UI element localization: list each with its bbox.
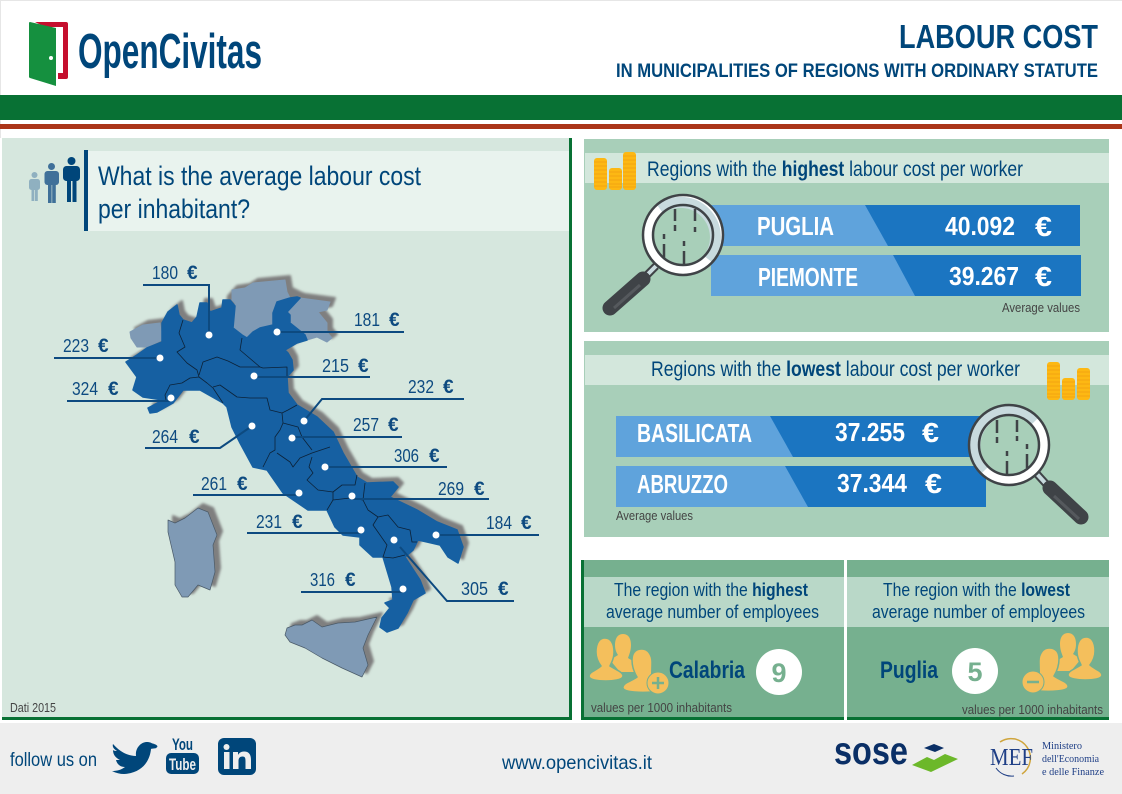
bar: Puglia — [711, 205, 1080, 246]
leader: 305: € — [498, 579, 509, 600]
leader: 305: 305 — [461, 579, 488, 599]
icon: people plus — [589, 634, 669, 694]
bar: Abruzzo: 37.344 — [837, 468, 907, 498]
leader: 184: € — [521, 513, 532, 534]
leader: 181: € — [389, 310, 400, 331]
leader: 316: 316 — [310, 570, 335, 590]
region name: Puglia — [880, 657, 939, 684]
leader: 261 — [193, 474, 302, 496]
leader: 316: € — [345, 570, 356, 591]
leader: 305 — [390, 536, 514, 601]
heading: Regions with the lowest labour cost per worker — [651, 358, 1020, 381]
website: www.opencivitas.it — [501, 752, 653, 774]
heading: average number of employees — [872, 601, 1085, 622]
regional borders — [165, 320, 417, 558]
leader: 184: 184 — [486, 513, 512, 533]
icon: youtube: Tube — [169, 755, 196, 774]
leader: 180: € — [187, 263, 198, 284]
leader: 180: 180 — [152, 263, 178, 283]
region name: Calabria — [669, 657, 746, 684]
source note: Dati 2015 — [10, 701, 56, 715]
leader: 181 — [274, 310, 404, 336]
header: logo — [29, 22, 262, 86]
bar: Puglia: 40.092 — [945, 211, 1015, 241]
leader: 223: € — [98, 336, 109, 357]
leader: 306: 306 — [394, 446, 419, 466]
icon: people — [29, 157, 80, 203]
leader: 264: € — [189, 427, 200, 448]
note: Average values — [616, 508, 693, 523]
icon: door — [29, 22, 68, 86]
panel: lowest number of employees — [847, 560, 1109, 720]
logo: MEF: e delle Finanze — [1042, 767, 1104, 778]
icon: people minus — [1022, 633, 1102, 693]
bar: Abruzzo — [616, 466, 986, 507]
leader: 215: € — [358, 356, 369, 377]
bar: Piemonte: PIEMONTE — [758, 262, 858, 292]
icon: linkedin — [218, 738, 256, 775]
icon: youtube: You — [172, 735, 193, 754]
leader: 184 — [432, 513, 539, 538]
leader: 264 — [145, 422, 256, 448]
header stripes — [0, 95, 1122, 129]
heading: average number of employees — [606, 601, 819, 622]
leader: 264: 264 — [152, 427, 178, 447]
leader: 324: € — [108, 379, 119, 400]
leader: 324 — [67, 379, 174, 402]
panel: highest number of employees — [581, 560, 844, 720]
leader: 261: 261 — [201, 474, 227, 494]
leader: 269 — [348, 479, 489, 500]
logo wordmark: OpenCivitas — [78, 25, 262, 79]
leader: 257 — [288, 415, 402, 442]
panel: lowest labour cost per worker — [584, 341, 1109, 537]
leader: 232: € — [443, 377, 454, 398]
islands and northern regions in grey — [130, 280, 377, 677]
leader: 232 — [300, 377, 464, 424]
leader: 257: 257 — [353, 415, 379, 435]
question band: per inhabitant? — [98, 194, 250, 224]
question band: What is the average labour cost — [98, 161, 421, 191]
bar: Piemonte: € — [1035, 261, 1052, 292]
bar: Puglia: € — [1035, 211, 1052, 242]
leader: 223 — [54, 336, 164, 362]
note: Average values — [1002, 300, 1080, 315]
icon: youtube — [166, 735, 199, 774]
map: Italy — [126, 276, 468, 677]
leader: 231 — [247, 512, 364, 534]
logo: MEF: Ministero — [1042, 741, 1082, 752]
ordinary statute regions — [126, 297, 463, 632]
leader: 257: € — [388, 415, 399, 436]
bar: Abruzzo: € — [925, 468, 942, 499]
bar: Piemonte — [711, 255, 1081, 296]
leader: 261: € — [237, 474, 248, 495]
leader: 269: € — [474, 479, 485, 500]
heading — [872, 579, 1085, 622]
heading: The region with the highest — [614, 579, 808, 600]
leader: 316 — [301, 570, 406, 592]
bar: Piemonte: 39.267 — [949, 261, 1019, 291]
bar: Puglia: PUGLIA — [757, 211, 834, 241]
value badge — [756, 649, 802, 695]
logo: sose: sose — [834, 730, 908, 773]
logo: MEF: dell'Economia — [1042, 754, 1099, 765]
question band — [84, 150, 569, 231]
bar: Abruzzo: ABRUZZO — [637, 469, 728, 499]
value badge — [952, 648, 998, 694]
heading — [606, 579, 819, 622]
icon: coins — [1047, 362, 1090, 400]
leader: 215: 215 — [322, 356, 349, 376]
heading: Regions with the highest labour cost per worker — [647, 158, 1023, 181]
logo: MEF — [990, 739, 1104, 778]
icon: coins — [594, 152, 636, 190]
leader: 324: 324 — [72, 379, 98, 399]
leader: 223: 223 — [63, 336, 89, 356]
value badge: 9 — [771, 658, 787, 688]
panel: highest labour cost per worker — [584, 139, 1109, 332]
note: values per 1000 inhabitants — [591, 700, 732, 715]
footer — [0, 723, 1122, 794]
value badge: 5 — [967, 657, 983, 687]
logo: MEF: MEF — [990, 745, 1033, 771]
icon: twitter — [112, 742, 157, 774]
bar: Basilicata: 37.255 — [835, 417, 905, 447]
icon: magnifying glass — [610, 195, 723, 308]
leader: 215 — [250, 356, 370, 380]
icon: magnifying glass — [969, 405, 1081, 519]
follow text: follow us on — [10, 749, 97, 771]
leader: 232: 232 — [408, 377, 434, 397]
bar: Basilicata — [616, 416, 985, 457]
map shadow — [131, 276, 468, 673]
leader: 181: 181 — [354, 310, 380, 330]
bar: Basilicata: € — [922, 417, 939, 448]
leader: 306: € — [429, 446, 440, 467]
note: values per 1000 inhabitants — [962, 702, 1103, 717]
bar: Basilicata: BASILICATA — [637, 418, 752, 448]
leader: 269: 269 — [438, 479, 464, 499]
leader: 180 — [143, 263, 212, 338]
panel: labour cost per inhabitant map — [2, 138, 572, 720]
leader: 231: 231 — [256, 512, 282, 532]
leader: 231: € — [292, 512, 303, 533]
heading: The region with the lowest — [883, 579, 1070, 600]
leader: 306 — [322, 446, 447, 470]
